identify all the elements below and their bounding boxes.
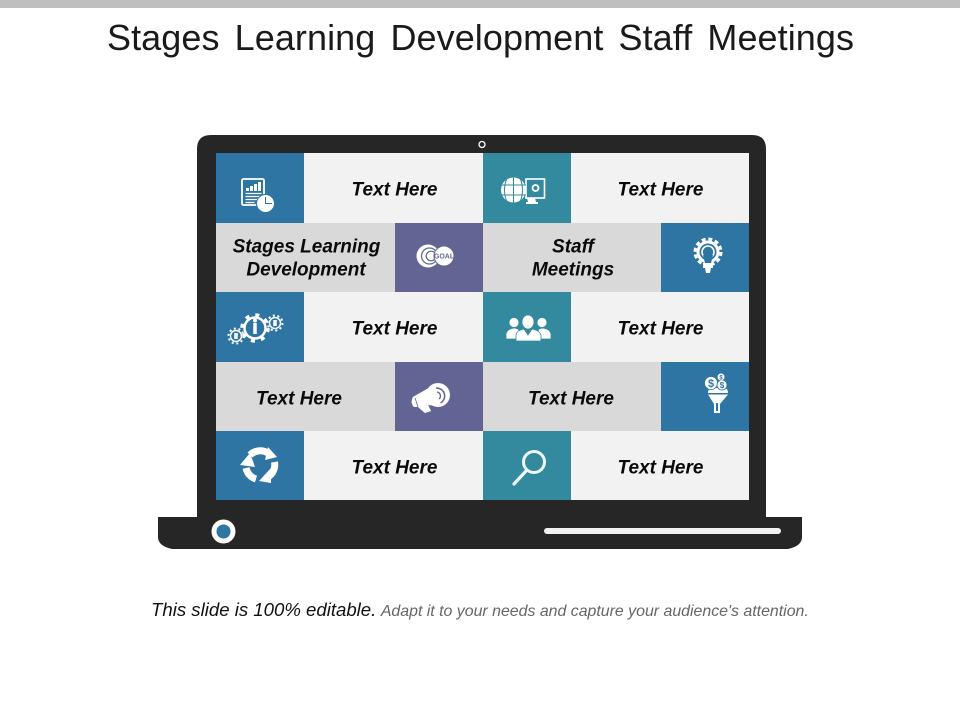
icon: goal target: GOAL	[434, 254, 455, 260]
title: Stages Learning Development Staff Meetings	[107, 17, 854, 58]
icon: business team	[506, 315, 551, 341]
row 2: Staff	[552, 236, 596, 258]
row 2: Stages Learning	[233, 236, 381, 258]
row 1	[216, 153, 749, 223]
icon: goal target	[416, 244, 455, 268]
laptop	[158, 135, 802, 549]
row 1: Text Here	[352, 180, 438, 200]
trackpad slot	[544, 528, 781, 534]
row 2: Development	[246, 260, 366, 280]
icon: dollar funnel: $	[708, 378, 714, 390]
screen grid	[216, 153, 749, 500]
icon: dollar funnel: $	[719, 376, 723, 382]
power button	[212, 520, 236, 544]
row 4: Text Here	[528, 388, 614, 410]
icon: globe and monitor	[501, 177, 544, 204]
row 4	[216, 362, 749, 431]
row 4: Text Here	[256, 388, 342, 410]
icon: team gears	[228, 315, 282, 344]
webcam	[479, 142, 485, 148]
icon: dollar funnel: $	[720, 381, 725, 390]
footer caption: This slide is 100% editable. Adapt it to your needs and capture your audience's attention.	[151, 599, 809, 620]
row 5	[216, 431, 749, 500]
icon: lightbulb gear	[695, 239, 721, 273]
icon: recycle arrows	[240, 447, 277, 483]
row 3: Text Here	[618, 318, 704, 340]
row 3	[216, 292, 749, 362]
icon: report with pie chart	[242, 179, 275, 213]
icon: megaphone	[412, 383, 450, 413]
laptop base	[158, 517, 802, 549]
row 2: Meetings	[532, 260, 614, 280]
row 2	[216, 223, 749, 292]
laptop body	[197, 135, 766, 517]
row 1: Text Here	[618, 180, 704, 200]
top bar	[0, 0, 960, 8]
row 3: Text Here	[352, 318, 438, 340]
row 5: Text Here	[618, 458, 704, 478]
icon: dollar funnel	[704, 374, 728, 413]
row 5: Text Here	[352, 458, 438, 478]
icon: magnifying glass	[514, 452, 544, 484]
